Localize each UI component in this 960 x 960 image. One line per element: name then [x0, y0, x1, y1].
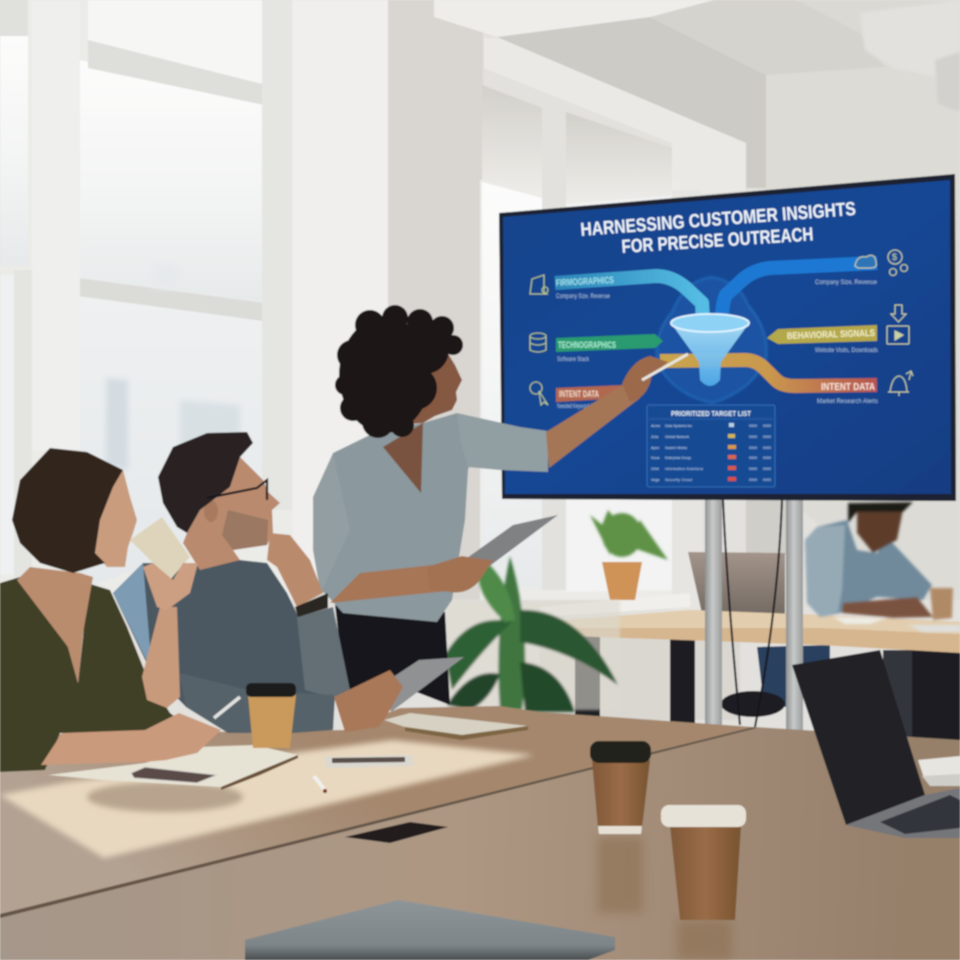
resting sleeve — [179, 673, 334, 733]
glasses — [207, 480, 267, 500]
phone — [131, 767, 217, 783]
lower arm — [41, 713, 221, 765]
second table — [0, 727, 960, 960]
pen on table — [314, 776, 327, 793]
coffee cup centre — [590, 741, 651, 834]
watch — [295, 593, 328, 617]
curly hair — [335, 305, 463, 438]
neck and chest — [17, 567, 93, 683]
notebook at left — [48, 745, 298, 790]
icons left column — [530, 275, 548, 405]
ribbon: technographics: TECHNOGRAPHICS — [558, 340, 616, 350]
coffee cup near man — [246, 683, 296, 748]
face — [95, 470, 137, 567]
list rows: Information Solutions — [665, 467, 703, 471]
desk papers — [833, 617, 887, 624]
sunlight patch — [0, 740, 534, 858]
table cable port — [345, 822, 448, 843]
cup reflections on table — [597, 837, 732, 960]
shirt — [113, 560, 335, 733]
held tablet — [460, 515, 558, 568]
bob hair — [12, 448, 123, 573]
list rows: 0000 — [763, 467, 771, 471]
ribbon: company data — [722, 263, 878, 320]
list rows: Search Works — [665, 446, 687, 450]
chest — [383, 423, 423, 493]
left window — [0, 0, 293, 600]
prioritized target list panel: PRIORITIZED TARGET LIST — [671, 409, 751, 418]
tablet — [384, 657, 464, 712]
list rows: 0000 — [749, 424, 757, 428]
list rows: Global Network — [665, 435, 689, 439]
middle window with blinds — [480, 85, 796, 720]
screen display — [503, 180, 951, 494]
ribbon: intent data right: Market Research Alerts — [817, 399, 878, 405]
ribbon: firmographics: FIRMOGRAPHICS — [556, 275, 614, 289]
hand with cup — [143, 563, 198, 610]
list rows: 0000 — [749, 435, 757, 439]
paper cup — [130, 517, 190, 580]
ribbon: company data: Company Size, Revenue — [815, 280, 878, 286]
face and neck — [395, 350, 462, 425]
ribbon: behavioral signals: BEHAVIORAL SIGNALS — [787, 328, 875, 342]
hair — [158, 432, 253, 533]
list rows: 0000 — [763, 435, 771, 439]
pointing sleeve — [457, 413, 548, 472]
neck and face — [183, 457, 280, 570]
notebook shadow — [87, 782, 243, 812]
ribbon: technographics — [556, 334, 663, 363]
ribbon: behavioral signals — [767, 325, 878, 354]
ribbon: behavioral signals: Website Visits, Downloads — [815, 348, 878, 354]
seated woman with cup — [0, 448, 240, 772]
list rows: Apex — [651, 446, 659, 450]
stylus — [642, 354, 688, 380]
list rows: 0000 — [749, 478, 757, 482]
icons right column: $ — [892, 252, 897, 262]
list rows: 0000 — [763, 446, 771, 450]
first table — [0, 706, 757, 918]
tabletop — [0, 706, 753, 914]
raised arm — [142, 607, 180, 708]
standing woman presenter — [313, 305, 688, 705]
raised hand — [267, 533, 323, 607]
list rows: 0000 — [749, 456, 757, 460]
chair — [721, 691, 785, 717]
ribbon: technographics: Software Stack — [557, 357, 590, 363]
list rows — [651, 423, 771, 482]
icons right column — [855, 250, 913, 396]
open laptop foreground — [792, 650, 960, 838]
large potted plant — [445, 556, 620, 712]
beard shadow — [222, 510, 268, 550]
ribbon: intent data right: INTENT DATA — [821, 382, 875, 393]
blouse — [0, 577, 182, 772]
ear — [204, 500, 218, 522]
list rows: Enterprise Group — [665, 456, 691, 460]
list rows: 0000 — [763, 424, 771, 428]
screen title: HARNESSING CUSTOMER INSIGHTS — [580, 199, 857, 241]
notebook centre — [384, 713, 528, 740]
screen bezel — [499, 174, 956, 501]
closed laptop front — [245, 900, 615, 960]
list rows: Zeta — [651, 435, 658, 439]
background person at desk — [805, 502, 960, 632]
ribbon: intent data left — [556, 385, 625, 410]
list rows: 0000 — [763, 456, 771, 460]
phone on table — [324, 755, 414, 768]
shirt torso — [322, 413, 480, 622]
list rows: 0000 — [749, 467, 757, 471]
list rows: 0000 — [763, 478, 771, 482]
lower forearm and hand — [330, 565, 460, 603]
back desk — [540, 610, 960, 742]
seated man — [113, 432, 464, 733]
prioritized target list panel — [647, 405, 775, 487]
desk cup — [930, 588, 953, 620]
resting hand — [334, 670, 403, 732]
ceiling duct — [860, 0, 960, 112]
trousers — [335, 605, 450, 705]
small plant on windowsill — [590, 510, 668, 600]
coffee cup front — [661, 805, 746, 920]
ribbon: intent data left: Needed Keyword Alerts — [557, 404, 601, 410]
ribbon: intent data right — [660, 360, 878, 405]
table edge — [0, 727, 757, 918]
list rows: Nova — [651, 456, 659, 460]
list rows: Data Systems Inc — [665, 424, 692, 428]
ribbon: intent data left: INTENT DATA — [559, 389, 599, 399]
list rows: Vega — [651, 478, 659, 482]
lower arm sleeve — [313, 453, 360, 608]
pen — [214, 697, 240, 718]
list rows: 0000 — [749, 446, 757, 450]
jeans — [757, 645, 830, 707]
screen title: FOR PRECISE OUTREACH — [621, 224, 814, 258]
sunlit sleeve — [113, 563, 152, 672]
list rows: Acme — [651, 424, 660, 428]
back laptop — [688, 552, 785, 620]
screen title — [580, 199, 857, 258]
list rows: Orbit — [651, 467, 659, 471]
funnel — [671, 314, 749, 386]
screen stand poles — [705, 498, 803, 730]
ribbon: firmographics — [555, 275, 703, 320]
funnel halo — [657, 277, 767, 403]
ribbon: firmographics: Company Size, Revenue — [556, 294, 611, 300]
presentation screen — [499, 174, 956, 501]
raised sleeve — [297, 607, 350, 698]
list rows: Security Cloud — [665, 478, 692, 482]
pointing forearm — [546, 384, 640, 468]
